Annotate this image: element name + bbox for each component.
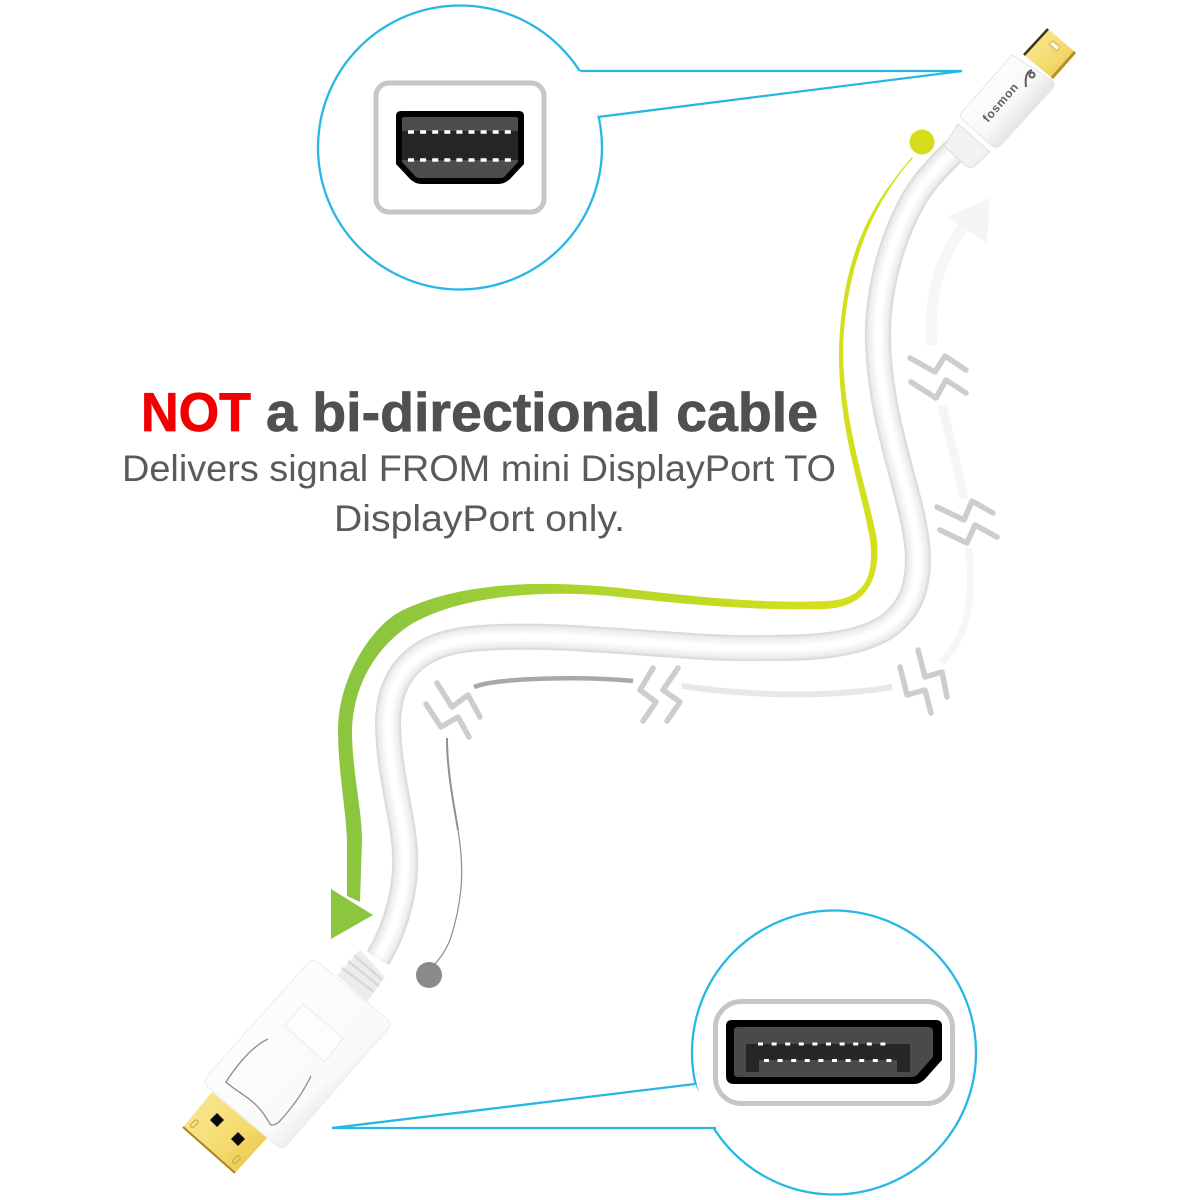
- headline: a bi-directional cable: [266, 381, 818, 443]
- label recess: [285, 1004, 343, 1062]
- green signal direction arrow: [331, 157, 913, 939]
- arrow head: [331, 889, 373, 939]
- housing: [960, 55, 1054, 148]
- latch outline: [226, 1039, 311, 1125]
- brand logo mark: [1026, 70, 1034, 87]
- signal start dot: grey: [416, 962, 442, 988]
- white cable: [378, 150, 955, 958]
- housing: [205, 960, 390, 1148]
- description line one: Delivers signal FROM mini DisplayPort TO: [122, 448, 836, 489]
- strain relief: [944, 124, 990, 167]
- gold tip: [1024, 29, 1075, 78]
- brand text: fosmon: [980, 80, 1021, 125]
- callout: DisplayPort connector circle: [332, 910, 976, 1194]
- mini DisplayPort plug: [944, 29, 1075, 167]
- signal path: grey line segments: [434, 678, 892, 965]
- connector box: mini DisplayPort port: [376, 83, 544, 212]
- lightning break symbols: [426, 356, 997, 737]
- strain relief: [337, 950, 385, 1002]
- headline: NOT: [141, 381, 251, 443]
- signal path: pale upper arrow: [931, 198, 990, 663]
- description line two: DisplayPort only.: [334, 498, 625, 539]
- DisplayPort plug: [183, 950, 390, 1173]
- signal end dot: yellow-green: [910, 130, 934, 154]
- connector box: DisplayPort port: [716, 1002, 952, 1104]
- callout: mini DisplayPort connector circle: [318, 6, 962, 290]
- gold contacts: [183, 1092, 267, 1173]
